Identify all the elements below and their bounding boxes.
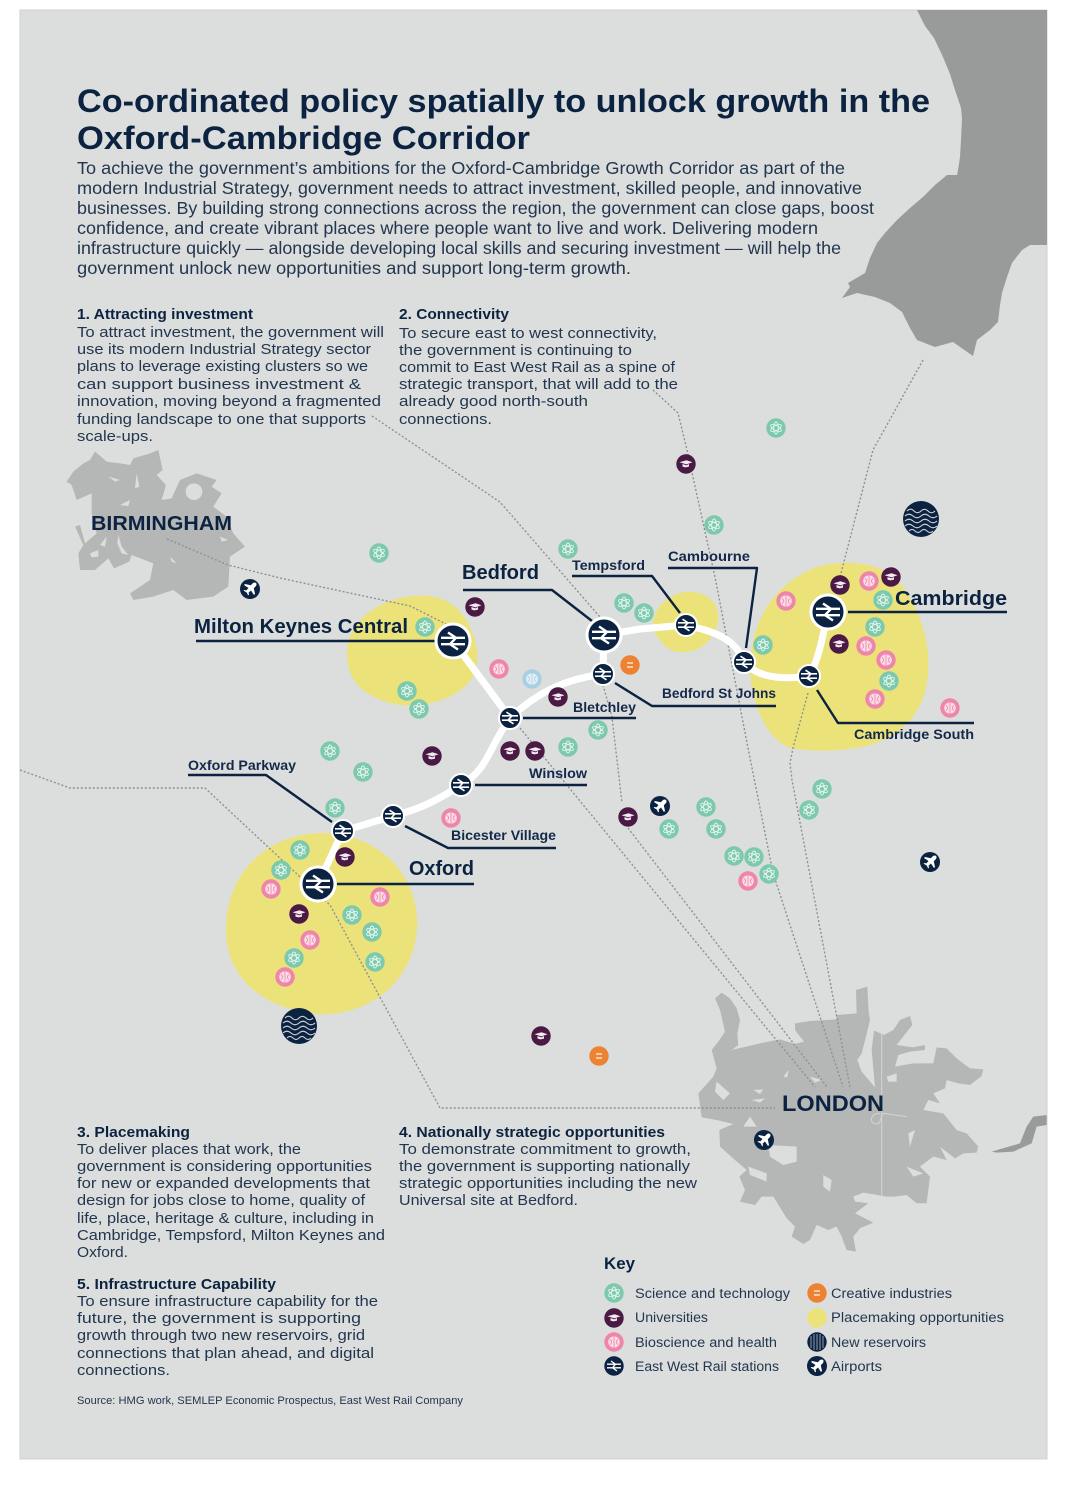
map: Greater London urban area [698, 987, 1047, 1252]
title [77, 83, 930, 156]
text block: 3. Placemaking [77, 1124, 385, 1261]
text block: 3. Placemaking: design for jobs close to home, quality of [77, 1192, 366, 1209]
icons: universities [289, 454, 901, 1046]
map: Birmingham urban area [67, 450, 245, 600]
text block: 2. Connectivity: 2. Connectivity [399, 306, 510, 323]
key: Science and technology [635, 1286, 790, 1301]
station and city labels: BIRMINGHAM [91, 513, 232, 535]
placemaking opportunity areas [226, 563, 928, 1014]
text block: 4. Nationally strategic opportunities: To demonstrate commitment to growth, [399, 1141, 691, 1158]
station and city labels: Oxford [409, 858, 474, 880]
icons: bioscience and health [261, 571, 960, 987]
station and city labels: Oxford Parkway [188, 757, 296, 773]
intro text: To achieve the government’s ambitions for the Oxford-Cambridge Growth Corridor as part of the [77, 158, 845, 178]
text block: 2. Connectivity [399, 306, 678, 428]
text block: 5. Infrastructure Capability: connections. [77, 1362, 170, 1379]
text block: 2. Connectivity: connections. [399, 411, 492, 428]
East West Rail stations [301, 595, 845, 901]
station and city labels [91, 513, 1007, 1116]
station and city labels: Cambridge South [854, 726, 974, 742]
icons: new reservoirs [281, 501, 939, 1044]
station leader lines [188, 568, 1007, 884]
text block: 1. Attracting investment: 1. Attracting investment [77, 306, 253, 323]
text block: 4. Nationally strategic opportunities: the government is supporting nationally [399, 1158, 691, 1175]
text block: 3. Placemaking: 3. Placemaking [77, 1124, 190, 1141]
text block: 2. Connectivity: commit to East West Rail as a spine of [399, 359, 676, 376]
text block: 4. Nationally strategic opportunities: 4. Nationally strategic opportunities [399, 1124, 665, 1141]
text block: 5. Infrastructure Capability: growth through two new reservoirs, grid [77, 1327, 365, 1344]
key: Bioscience and health [635, 1335, 777, 1350]
text block: 2. Connectivity: already good north-south [399, 393, 588, 410]
dotted routes to London and Birmingham [20, 360, 923, 1108]
intro text: infrastructure quickly — alongside developing local skills and securing investment — will help the [77, 238, 841, 258]
text block: 1. Attracting investment: funding landscape to one that supports [77, 411, 366, 428]
text block: 4. Nationally strategic opportunities: strategic opportunities including the new [399, 1175, 697, 1192]
key: East West Rail stations [635, 1359, 779, 1374]
intro text: government unlock new opportunities and support long-term growth. [77, 258, 631, 278]
intro text [77, 158, 874, 278]
text block: 2. Connectivity: the government is continuing to [399, 342, 632, 359]
station and city labels: Winslow [529, 765, 587, 781]
text block: 1. Attracting investment: To attract investment, the government will [77, 324, 384, 341]
station and city labels: Milton Keynes Central [194, 616, 408, 638]
text block: 5. Infrastructure Capability: connections that plan ahead, and digital [77, 1345, 374, 1362]
text block: 5. Infrastructure Capability: 5. Infrastructure Capability [77, 1276, 277, 1293]
text block: 3. Placemaking: life, place, heritage & culture, including in [77, 1210, 374, 1227]
title: Oxford-Cambridge Corridor [77, 120, 530, 156]
intro text: modern Industrial Strategy, government needs to attract investment, skilled people, and innovative [77, 178, 862, 198]
key: Placemaking opportunities [831, 1310, 1004, 1325]
station and city labels: Tempsford [572, 557, 645, 573]
text block: 3. Placemaking: Cambridge, Tempsford, Milton Keynes and [77, 1227, 385, 1244]
station and city labels: Bletchley [573, 699, 636, 715]
key: Universities [635, 1310, 708, 1325]
key: Creative industries [831, 1286, 952, 1301]
text block: 5. Infrastructure Capability: To ensure infrastructure capability for the [77, 1293, 378, 1310]
text block: 1. Attracting investment: plans to leverage existing clusters so we [77, 358, 368, 375]
text block: 2. Connectivity: To secure east to west connectivity, [399, 325, 657, 342]
icons: science and technology sites [271, 418, 899, 972]
source note: Source: HMG work, SEMLEP Economic Prospectus, East West Rail Company [77, 1395, 463, 1407]
icons: airports [240, 579, 940, 1150]
key: Airports [831, 1359, 882, 1374]
station and city labels: Cambourne [668, 548, 750, 564]
station and city labels: LONDON [782, 1091, 884, 1116]
key: New reservoirs [831, 1335, 926, 1350]
key [604, 1254, 1004, 1376]
text block: 3. Placemaking: government is considering opportunities [77, 1158, 372, 1175]
text block: 3. Placemaking: To deliver places that work, the [77, 1141, 301, 1158]
text block: 1. Attracting investment: use its modern Industrial Strategy sector [77, 341, 371, 358]
station and city labels: Bedford St Johns [662, 685, 776, 701]
key: Key [604, 1254, 636, 1273]
station and city labels: Cambridge [895, 588, 1007, 610]
text block: 5. Infrastructure Capability [77, 1276, 378, 1379]
icons: creative industries [589, 655, 640, 1066]
text block: 1. Attracting investment: innovation, moving beyond a fragmented [77, 393, 381, 410]
text block: 1. Attracting investment: can support business investment & [77, 376, 361, 393]
map: Thames estuary [992, 1115, 1047, 1153]
title: Co-ordinated policy spatially to unlock growth in the [77, 83, 930, 119]
text block: 1. Attracting investment: scale-ups. [77, 428, 153, 445]
text block: 3. Placemaking: Oxford. [77, 1244, 128, 1261]
map: North Sea coast [842, 10, 1047, 356]
text block: 3. Placemaking: for new or expanded developments that [77, 1175, 371, 1192]
text block: 4. Nationally strategic opportunities [399, 1124, 697, 1209]
text block: 5. Infrastructure Capability: future, the government is supporting [77, 1310, 361, 1327]
intro text: businesses. By building strong connections across the region, the government can close gaps, boost [77, 198, 874, 218]
station and city labels: Bedford [462, 562, 539, 584]
East West Rail line [318, 612, 828, 884]
station and city labels: Bicester Village [451, 827, 556, 843]
text block: 1. Attracting investment [77, 306, 384, 445]
text block: 4. Nationally strategic opportunities: Universal site at Bedford. [399, 1192, 578, 1209]
text block: 2. Connectivity: strategic transport, that will add to the [399, 376, 678, 393]
intro text: confidence, and create vibrant places where people want to live and work. Delivering modern [77, 218, 818, 238]
